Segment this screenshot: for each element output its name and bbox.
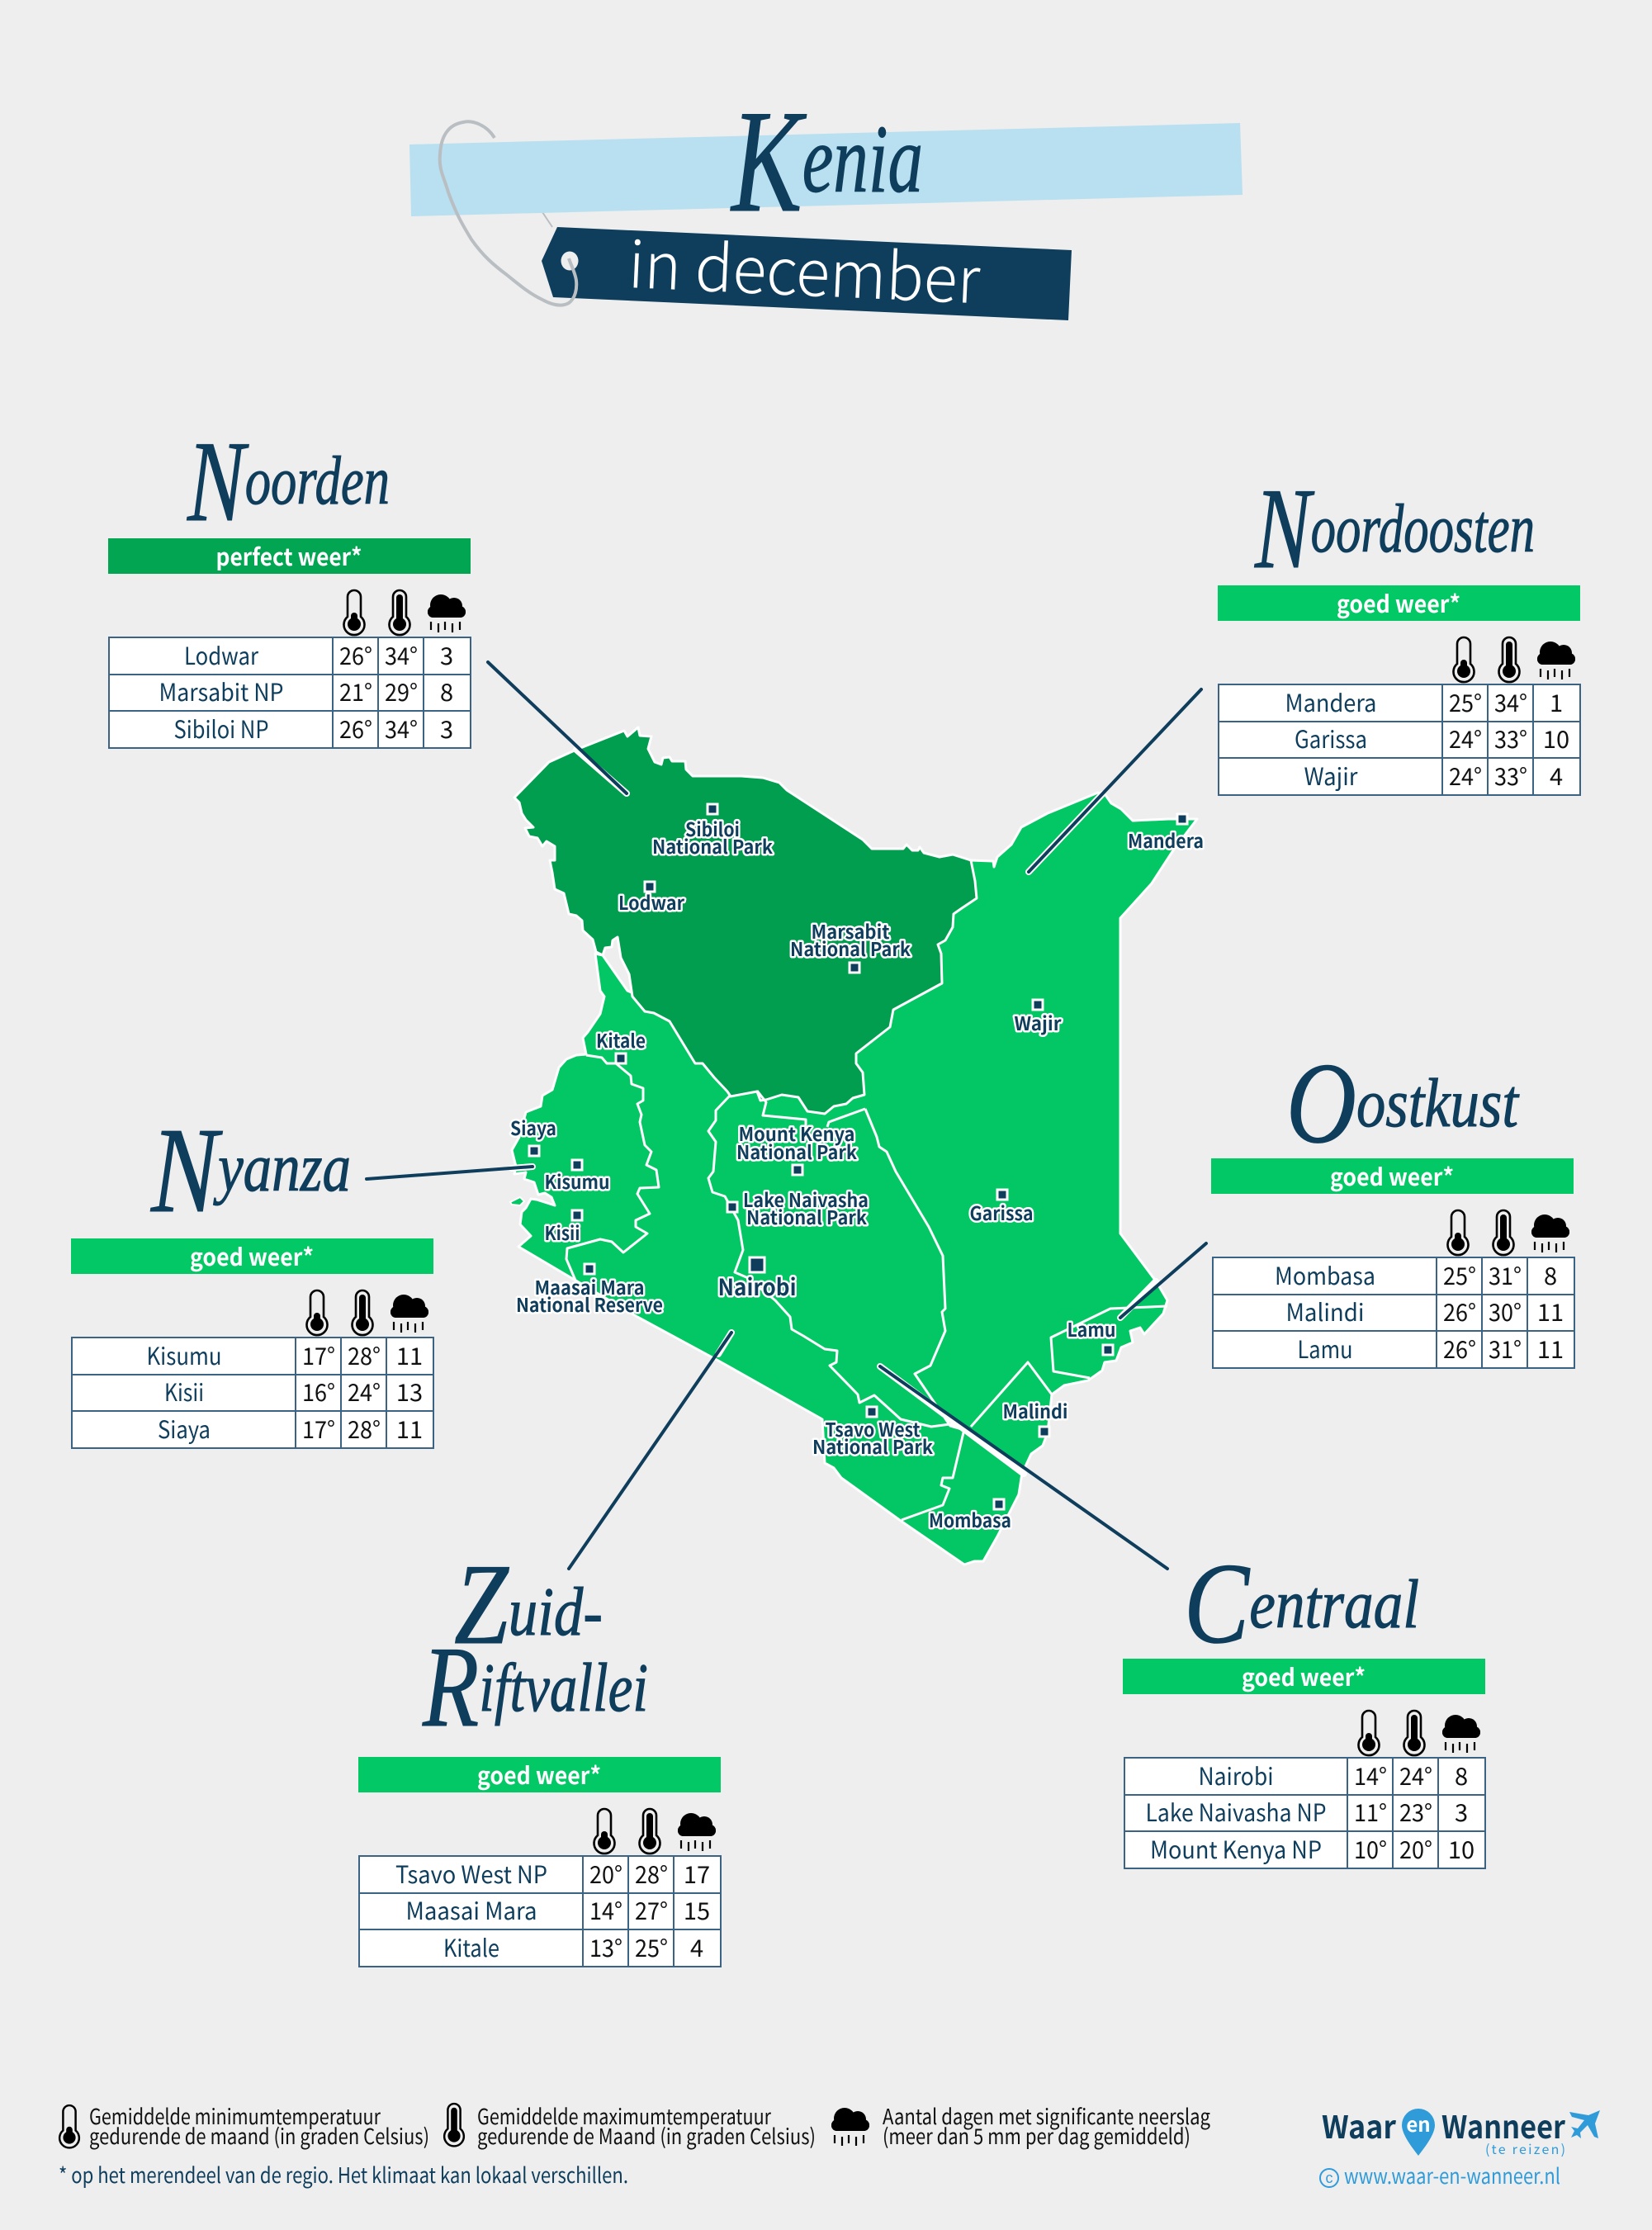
table: Centraal: 3 xyxy=(1455,1794,1468,1829)
table: Oostkust: 26° xyxy=(1443,1294,1476,1328)
table: Oostkust: 31° xyxy=(1489,1257,1522,1292)
label: Tsavo West National Park xyxy=(812,1414,933,1460)
heading: Centraal: entraal xyxy=(1249,1566,1419,1643)
label: Tsavo West National Park: National Park xyxy=(812,1432,933,1460)
icon: legend rain cloud xyxy=(831,2108,869,2146)
table: Centraal: Nairobi xyxy=(1199,1758,1273,1792)
icon: max temperature xyxy=(352,1290,373,1335)
map: Nyanza border xyxy=(566,1055,659,1282)
label: Kitale: Kitale xyxy=(596,1025,646,1053)
logo text: te reizen: (te reizen) xyxy=(1485,2138,1565,2158)
leader: Centraal xyxy=(880,1366,1167,1569)
map of Kenya xyxy=(367,662,1206,1569)
legend text: max temperature: gedurende de Maand (in graden Celsius) xyxy=(477,2120,816,2151)
label: Nairobi: Nairobi xyxy=(718,1270,796,1303)
city labels xyxy=(510,814,1204,1533)
table: Noorden: 34° xyxy=(385,711,418,746)
table: Centraal: 24° xyxy=(1399,1758,1432,1792)
table: Centraal: 20° xyxy=(1399,1831,1432,1866)
legend text: min temperature: Gemiddelde minimumtemperatuur xyxy=(89,2100,381,2131)
label: Lake Naivasha National Park: National Park xyxy=(746,1202,867,1230)
map: north region xyxy=(514,727,977,1114)
table: Noordoosten: 24° xyxy=(1449,721,1482,755)
panel: Noorden xyxy=(108,418,471,748)
legend text: max temperature: Gemiddelde maximumtemperatuur xyxy=(477,2100,772,2131)
icon: legend max temperature xyxy=(444,2104,464,2146)
table: Zuid-Riftvallei: 20° xyxy=(589,1856,622,1891)
heading: Oostkust: O xyxy=(1286,1039,1356,1167)
map: coast border south xyxy=(902,1429,964,1520)
map: Lake Victoria island xyxy=(510,1197,524,1205)
logo pin with en xyxy=(1402,2109,1435,2156)
heading: Oostkust: ostkust xyxy=(1356,1065,1520,1142)
copyright icon xyxy=(1320,2169,1338,2187)
table: Zuid-Riftvallei: 4 xyxy=(690,1929,703,1964)
label: Lake Naivasha National Park: Lake Naivasha xyxy=(743,1185,869,1213)
table: Centraal: 23° xyxy=(1399,1794,1432,1829)
status banner: goed weer xyxy=(71,1238,433,1274)
table: Nyanza: Kisii xyxy=(164,1374,204,1409)
label: Mount Kenya National Park xyxy=(736,1119,857,1165)
heading: Noordoosten: oordoosten xyxy=(1311,490,1535,567)
heading: Zuid-Riftvallei: uid- xyxy=(509,1574,603,1650)
icon: rain cloud xyxy=(1537,642,1575,679)
table: Centraal: 10 xyxy=(1448,1831,1474,1866)
status banner: goed weer xyxy=(1123,1659,1485,1694)
label: Maasai Mara National Reserve: National Reserve xyxy=(516,1290,663,1318)
map: country base xyxy=(512,793,1197,1565)
thin tag string xyxy=(542,212,552,227)
logo text: Wanneer: Wanneer xyxy=(1441,2102,1565,2147)
table: Noordoosten: 10 xyxy=(1543,721,1569,755)
table: Noorden: 29° xyxy=(385,674,418,708)
label: Marsabit National Park: Marsabit xyxy=(811,916,890,945)
table: Noordoosten xyxy=(1219,684,1580,795)
table: Centraal xyxy=(1124,1758,1485,1868)
label: Sibiloi National Park: National Park xyxy=(652,831,773,859)
table: Noorden: 21° xyxy=(339,674,372,708)
table: Zuid-Riftvallei: Tsavo West NP xyxy=(395,1856,547,1891)
heading: Zuid-Riftvallei: Z xyxy=(454,1541,510,1669)
icon: max temperature xyxy=(1499,637,1519,682)
map: central region west border xyxy=(708,1095,962,1428)
subtitle: in december: in december xyxy=(627,214,983,322)
panel: Nyanza xyxy=(71,1103,433,1448)
label: Maasai Mara National Reserve: Maasai Mara xyxy=(535,1272,644,1300)
label: Malindi: Malindi xyxy=(1002,1396,1068,1424)
table: Noorden xyxy=(109,637,471,748)
heading: Nyanza: N xyxy=(149,1103,223,1238)
table: Noordoosten: 1 xyxy=(1550,684,1563,719)
label: Lake Naivasha National Park xyxy=(743,1185,869,1230)
icon: max temperature xyxy=(1493,1210,1514,1255)
legend text: max temperature xyxy=(477,2100,816,2151)
table: Noorden: 3 xyxy=(440,711,453,746)
legend text: rain: Aantal dagen met significante neerslag xyxy=(883,2100,1210,2131)
label: Sibiloi National Park xyxy=(652,814,773,859)
legend text: rain xyxy=(883,2100,1210,2151)
table: Noorden: 26° xyxy=(339,711,372,746)
table: Noorden: Marsabit NP xyxy=(159,674,284,708)
table: Zuid-Riftvallei xyxy=(359,1856,721,1967)
icon: rain cloud xyxy=(1531,1214,1569,1252)
table: Centraal: 11° xyxy=(1354,1794,1387,1829)
heading: Nyanza: yanza xyxy=(212,1129,351,1206)
table: Noordoosten: 4 xyxy=(1550,758,1563,793)
status banner: goed weer xyxy=(358,1757,721,1792)
icon: max temperature xyxy=(1403,1711,1425,1755)
map: Mount Kenya border xyxy=(757,1091,806,1127)
panel: Oostkust xyxy=(1211,1039,1574,1368)
table: Zuid-Riftvallei: 17 xyxy=(684,1856,710,1891)
icon: min temperature xyxy=(1448,1210,1468,1255)
light blue title band xyxy=(409,123,1243,216)
status banner: goed weer: goed weer* xyxy=(477,1757,601,1792)
table: Nyanza: Kisumu xyxy=(147,1338,221,1372)
icon: legend min temperature xyxy=(59,2105,79,2147)
table: Zuid-Riftvallei: 27° xyxy=(635,1892,668,1927)
panel: Noordoosten xyxy=(1218,465,1580,795)
status banner: goed weer xyxy=(1211,1158,1574,1194)
tag hole xyxy=(561,251,578,271)
title block xyxy=(409,79,1243,322)
table: Noorden: 26° xyxy=(339,637,372,672)
city markers xyxy=(529,804,1187,1509)
table: Centraal: 10° xyxy=(1354,1831,1387,1866)
icon: rain cloud xyxy=(678,1813,716,1851)
navy tag xyxy=(542,227,1072,320)
label: Marsabit National Park: National Park xyxy=(790,934,911,962)
table: Noordoosten: Mandera xyxy=(1285,684,1377,719)
legend text: min temperature: gedurende de maand (in graden Celsius) xyxy=(89,2120,429,2151)
table: Noordoosten: 24° xyxy=(1449,758,1482,793)
leader: Oostkust xyxy=(1120,1243,1206,1318)
map: central region east border xyxy=(865,1109,962,1429)
table: Nyanza: 28° xyxy=(348,1411,381,1446)
table: Centraal: 8 xyxy=(1455,1758,1468,1792)
icon: rain cloud xyxy=(428,594,466,632)
logo pin with en: en xyxy=(1406,2109,1431,2138)
table: Zuid-Riftvallei: 15 xyxy=(684,1892,710,1927)
panel: Zuid-Riftvallei xyxy=(358,1541,721,1967)
label: Maasai Mara National Reserve xyxy=(516,1272,663,1318)
leader: Noorden xyxy=(488,662,627,793)
table: Noordoosten: 34° xyxy=(1494,684,1527,719)
icon: rain cloud xyxy=(1442,1715,1480,1753)
icon: max temperature xyxy=(639,1809,660,1854)
icon: plane xyxy=(1569,2110,1600,2138)
heading: Noordoosten: N xyxy=(1254,465,1314,593)
label: Siaya: Siaya xyxy=(510,1113,556,1141)
status banner: goed weer: goed weer* xyxy=(190,1238,314,1273)
table: Oostkust: 31° xyxy=(1489,1331,1522,1366)
leader: Zuid-Riftvallei xyxy=(569,1333,731,1569)
leader: Noordoosten xyxy=(1029,689,1201,872)
table: Oostkust: 25° xyxy=(1443,1257,1476,1292)
status banner: perfect weer: perfect weer* xyxy=(216,538,362,573)
table: Noordoosten: 25° xyxy=(1449,684,1482,719)
table: Zuid-Riftvallei: 14° xyxy=(589,1892,622,1927)
table: Oostkust: 8 xyxy=(1544,1257,1557,1292)
table: Zuid-Riftvallei: Kitale xyxy=(443,1929,499,1964)
table: Nyanza xyxy=(72,1338,433,1448)
heading: Zuid-Riftvallei: R xyxy=(422,1623,479,1751)
table: Noorden: 34° xyxy=(385,637,418,672)
status banner: goed weer: goed weer* xyxy=(1242,1659,1366,1693)
map: Lamu border xyxy=(1051,1306,1167,1378)
panel: Centraal xyxy=(1123,1540,1485,1868)
footnote: * op het merendeel van de regio. Het klimaat kan lokaal verschillen. xyxy=(59,2159,628,2190)
leader: Nyanza xyxy=(367,1167,533,1179)
legend text: rain: (meer dan 5 mm per dag gemiddeld) xyxy=(883,2120,1190,2151)
title: Kenia: K xyxy=(730,79,807,243)
label: Mombasa: Mombasa xyxy=(929,1505,1011,1533)
icon: max temperature xyxy=(390,590,409,635)
label: Marsabit National Park xyxy=(790,916,911,962)
label: Lodwar: Lodwar xyxy=(618,888,685,916)
table: Oostkust: 11 xyxy=(1537,1331,1564,1366)
table: Nyanza: 24° xyxy=(348,1374,381,1409)
icon: min temperature xyxy=(1453,637,1474,682)
table: Zuid-Riftvallei: 25° xyxy=(635,1929,668,1964)
map: central notch border xyxy=(827,1109,865,1127)
status banner: goed weer xyxy=(1218,585,1580,621)
tag string loop xyxy=(440,121,576,305)
table: Noorden: 8 xyxy=(440,674,453,708)
table: Oostkust: Malindi xyxy=(1286,1294,1364,1328)
label: Lamu: Lamu xyxy=(1067,1314,1116,1342)
table: Zuid-Riftvallei: 13° xyxy=(589,1929,622,1964)
table: Oostkust: Lamu xyxy=(1298,1331,1352,1366)
label: Garissa: Garissa xyxy=(969,1198,1034,1226)
icon: rain cloud xyxy=(391,1295,428,1333)
logo: Waar en Wanneer xyxy=(1320,2102,1600,2190)
title: Kenia: enia xyxy=(802,105,923,213)
table: Noorden: Lodwar xyxy=(184,637,259,672)
icon: min temperature xyxy=(307,1290,327,1335)
heading: Noorden: N xyxy=(187,418,249,546)
heading: Noorden: oorden xyxy=(245,443,390,519)
table: Zuid-Riftvallei: Maasai Mara xyxy=(406,1892,537,1927)
table: Centraal: 14° xyxy=(1354,1758,1387,1792)
table: Centraal: Mount Kenya NP xyxy=(1150,1831,1322,1866)
label: Tsavo West National Park: Tsavo West xyxy=(826,1414,921,1442)
table: Noorden: Sibiloi NP xyxy=(173,711,269,746)
label: Mount Kenya National Park: National Park xyxy=(736,1137,857,1165)
logo text: Waar: Waar xyxy=(1322,2102,1396,2147)
table: Oostkust: 11 xyxy=(1537,1294,1564,1328)
table: Noordoosten: Wajir xyxy=(1304,758,1358,793)
leader lines xyxy=(367,662,1206,1569)
label: Kisii: Kisii xyxy=(545,1218,580,1246)
status banner: goed weer: goed weer* xyxy=(1330,1158,1454,1193)
status banner: perfect weer xyxy=(108,538,471,574)
table: Oostkust: 26° xyxy=(1443,1331,1476,1366)
table: Oostkust: Mombasa xyxy=(1275,1257,1375,1292)
table: Nyanza: 11 xyxy=(396,1338,423,1372)
table: Nyanza: 28° xyxy=(348,1338,381,1372)
heading: Zuid-Riftvallei: iftvallei xyxy=(479,1650,648,1726)
label: Mandera: Mandera xyxy=(1128,826,1204,854)
table: Nyanza: 11 xyxy=(396,1411,423,1446)
copyright icon: c xyxy=(1326,2170,1332,2186)
table: Oostkust xyxy=(1213,1257,1574,1368)
table: Noordoosten: 33° xyxy=(1494,721,1527,755)
table: Noordoosten: Garissa xyxy=(1295,721,1367,755)
table: Centraal: Lake Naivasha NP xyxy=(1146,1794,1326,1829)
heading: Zuid-Riftvallei xyxy=(422,1541,648,1751)
table: Oostkust: 30° xyxy=(1489,1294,1522,1328)
icon: min temperature xyxy=(1359,1711,1379,1755)
label: Wajir: Wajir xyxy=(1014,1008,1062,1036)
label: Sibiloi National Park: Sibiloi xyxy=(685,814,740,842)
table: Noorden: 3 xyxy=(440,637,453,672)
heading: Centraal: C xyxy=(1184,1540,1251,1668)
map: Malindi border xyxy=(971,1362,1052,1427)
table: Zuid-Riftvallei: 28° xyxy=(635,1856,668,1891)
status banner: goed weer: goed weer* xyxy=(1337,585,1460,620)
icon: min temperature xyxy=(594,1809,614,1854)
label: Kisumu: Kisumu xyxy=(545,1167,609,1195)
legend text: min temperature xyxy=(89,2100,429,2151)
table: Nyanza: 13 xyxy=(396,1374,423,1409)
table: Nyanza: Siaya xyxy=(158,1411,211,1446)
table: Nyanza: 16° xyxy=(302,1374,335,1409)
website url: www.waar-en-wanneer.nl xyxy=(1344,2160,1560,2190)
table: Nyanza: 17° xyxy=(302,1411,335,1446)
table: Noordoosten: 33° xyxy=(1494,758,1527,793)
legend xyxy=(59,2100,1210,2190)
label: Mount Kenya National Park: Mount Kenya xyxy=(738,1119,855,1147)
table: Nyanza: 17° xyxy=(302,1338,335,1372)
icon: min temperature xyxy=(343,590,365,635)
